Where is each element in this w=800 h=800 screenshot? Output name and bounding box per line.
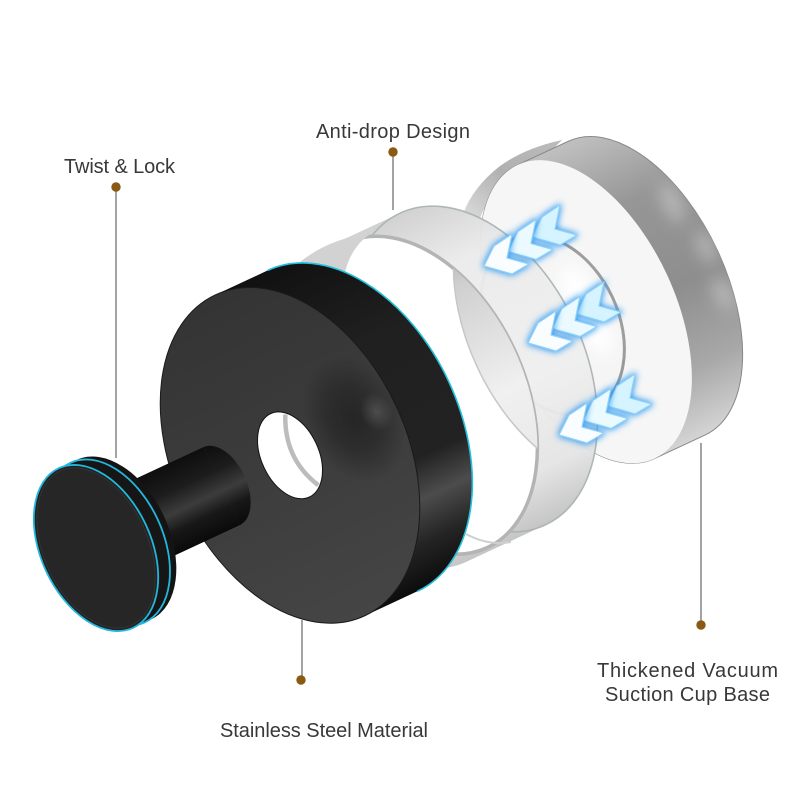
icon: chevrons lower [559,374,652,443]
ring inner wall, top-left [300,233,372,272]
callout: twist and lock: Twist & Lock [64,156,176,178]
callout: anti-drop design [316,121,470,210]
exploded product illustration [346,136,744,568]
stainless steel disc [160,262,474,624]
disc centre hole [257,411,323,500]
hook head [9,437,201,651]
icon: chevrons middle [528,282,621,351]
callout: anti-drop design: Anti-drop Design [316,121,470,143]
anti-drop clear ring [346,205,598,568]
callout: stainless steel material [220,620,428,742]
callout: thickened vacuum suction cup base: Suction Cup Base [605,684,770,706]
callout: thickened vacuum suction cup base: Thickened Vacuum [597,660,778,682]
suction cup base [482,136,744,464]
callout: stainless steel material: Stainless Steel Material [220,720,428,742]
hook stem [104,437,262,572]
suction cup sliver, top-left edge [463,140,562,218]
icon: chevrons upper [484,205,577,274]
callout: thickened vacuum suction cup base [597,443,778,706]
ring inner wall, bottom [466,534,511,543]
callout: twist and lock [64,156,176,458]
